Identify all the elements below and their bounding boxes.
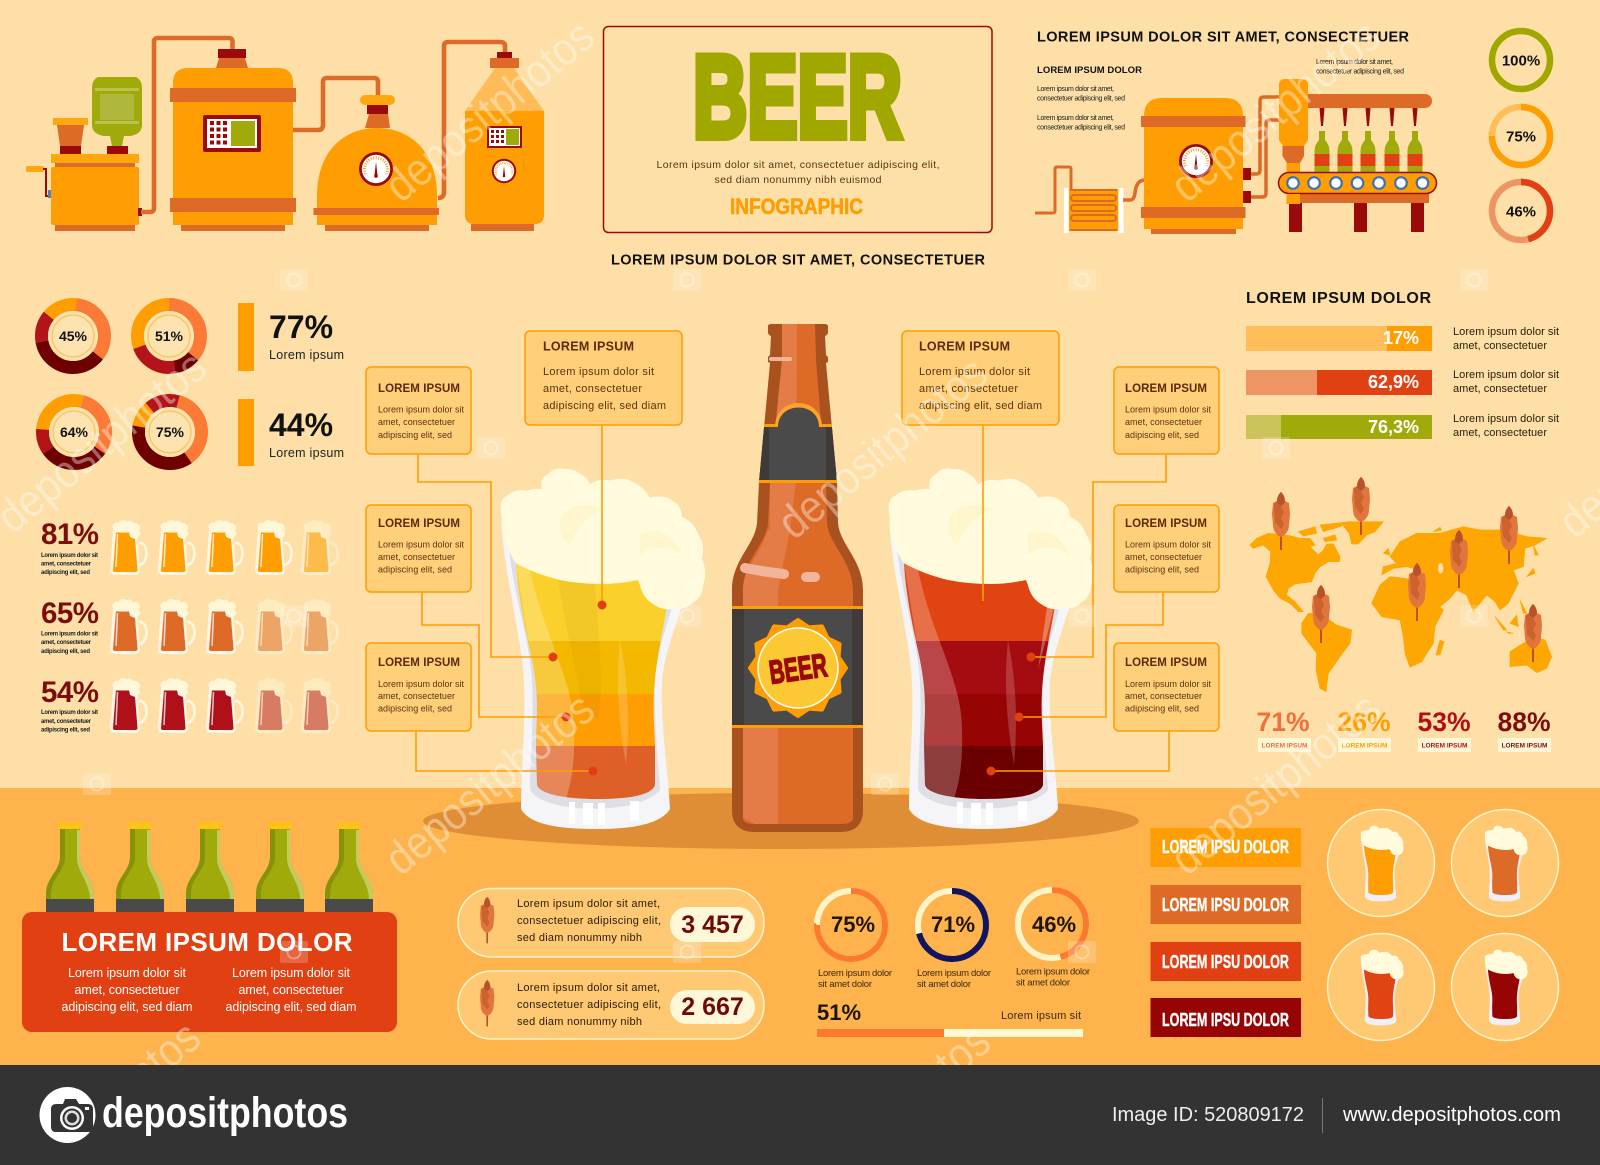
donut chart: 51%: 51% [155, 328, 184, 344]
text block: bottling notes [1037, 59, 1404, 132]
glass: light beer [501, 468, 705, 829]
bar: 62,9% [1246, 370, 1432, 395]
callout: right bottom: amet, consectetuer [1125, 691, 1202, 701]
callout: left top: Lorem ipsum dolor sit [378, 404, 464, 414]
legend label: dark red [1150, 998, 1301, 1037]
ring chart: bottom 75%: 75% [831, 912, 875, 937]
pill: 2 667: Lorem ipsum dolor sit amet, [517, 982, 660, 994]
bottle main label [728, 606, 868, 728]
callout: left top: LOREM IPSUM [378, 383, 460, 395]
mug row: 81%: Lorem ipsum dolor sit [41, 553, 98, 559]
watermarks: depositphotos [767, 346, 997, 549]
text block: bar notes: Lorem ipsum dolor sit [1453, 369, 1559, 381]
stat labels under map: LOREM IPSUM [1502, 742, 1547, 750]
pill: 3 457 [458, 888, 764, 957]
mug row: 65%: 65% [41, 597, 99, 630]
ring chart: 100% [1492, 31, 1550, 89]
callout: right bottom: LOREM IPSUM [1125, 657, 1207, 669]
callout: top right of bottle: Lorem ipsum dolor sit [919, 366, 1030, 378]
ring chart: bottom 46% [1016, 890, 1090, 988]
heading: bottling section: LOREM IPSUM DOLOR SIT AMET, CONSECTETUER [1037, 30, 1410, 46]
text block: bottling notes: Lorem ipsum dolor sit amet, [1037, 115, 1114, 122]
callout: left middle: Lorem ipsum dolor sit [378, 540, 464, 550]
callout: top right of bottle: amet, consectetuer [919, 383, 1018, 395]
callout: top right of bottle: LOREM IPSUM [919, 340, 1010, 354]
callout: right middle [1114, 505, 1219, 592]
callout: top left of bottle: Lorem ipsum dolor sit [543, 366, 654, 378]
callout: right middle: amet, consectetuer [1125, 552, 1202, 562]
text block: bottling notes: Lorem ipsum dolor sit amet, [1316, 59, 1393, 66]
donut chart: 45%: 45% [59, 328, 88, 344]
legend label: red [1150, 942, 1301, 981]
text block: bar notes: amet, consectetuer [1453, 383, 1547, 395]
callout: right top: Lorem ipsum dolor sit [1125, 404, 1211, 414]
table shadow [423, 793, 1139, 849]
icon: copper kettle [314, 95, 439, 231]
legend label: copper: LOREM IPSU DOLOR [1162, 895, 1289, 915]
stat: 77% [238, 303, 344, 371]
mug row: 54%: Lorem ipsum dolor sit [41, 710, 98, 716]
donut chart: 45% [42, 304, 104, 368]
subtitle text [656, 159, 940, 186]
icon: copper glass in circle [1452, 810, 1558, 916]
panel: title [604, 26, 992, 232]
callout: top left of bottle: LOREM IPSUM [543, 340, 634, 354]
ring chart: bottom 71%: 71% [931, 912, 975, 937]
connector dots [548, 600, 1036, 776]
callout: right bottom: adipiscing elit, sed [1125, 704, 1199, 714]
bar: 17% [1246, 326, 1432, 351]
ring chart: 75%: 75% [1506, 128, 1536, 146]
mug row: 81%: 81% [41, 518, 99, 551]
donut chart: 64%: 64% [60, 424, 89, 440]
stat labels under map: LOREM IPSUM [1262, 742, 1307, 750]
panel: red text block [22, 912, 397, 1032]
row of green bottles [46, 822, 373, 912]
mug row: 54% [41, 676, 338, 734]
progress bar: 51%: Lorem ipsum sit [1001, 1010, 1081, 1022]
stat: 77%: Lorem ipsum [269, 348, 344, 362]
icon: large mash tank [170, 49, 296, 231]
mug row: 54%: amet, consectetuer [41, 719, 92, 725]
donut chart: 75%: 75% [156, 424, 185, 440]
legend label: dark red: LOREM IPSU DOLOR [1162, 1010, 1289, 1030]
callout: right middle: Lorem ipsum dolor sit [1125, 540, 1211, 550]
pill: 2 667 [458, 971, 764, 1039]
pill: 3 457: sed diam nonummy nibh [517, 932, 642, 944]
icon: fermentation tank [465, 52, 544, 231]
callout: right top: adipiscing elit, sed [1125, 430, 1199, 440]
bottles on conveyor [1314, 108, 1422, 172]
stat: 44%: Lorem ipsum [269, 446, 344, 460]
text block: bar notes: Lorem ipsum dolor sit [1453, 326, 1559, 338]
callout: top right of bottle: adipiscing elit, sed diam [919, 400, 1042, 412]
bar: 76,3%: 76,3% [1368, 417, 1419, 437]
callout: left middle: amet, consectetuer [378, 552, 455, 562]
footer logo wordmark: depositphotos [102, 1089, 348, 1137]
ring chart: bottom 71% [917, 891, 991, 990]
callout: right middle: LOREM IPSUM [1125, 518, 1207, 530]
icon: amber glass in circle [1328, 810, 1434, 916]
pill: 3 457: Lorem ipsum dolor sit amet, [517, 898, 660, 910]
stat labels under map: LOREM IPSUM [1422, 742, 1467, 750]
progress bar: 51%: 51% [817, 1000, 861, 1025]
panel: red text block: Lorem ipsum dolor sit [68, 966, 187, 980]
bar: 76,3% [1246, 415, 1432, 439]
callout: left bottom: LOREM IPSUM [378, 657, 460, 669]
stat labels under map: 71% [1256, 707, 1310, 737]
connector lines [416, 425, 1169, 771]
icon: cooling coil [1035, 167, 1144, 233]
callout: left bottom: Lorem ipsum dolor sit [378, 679, 464, 689]
panel: red text block: amet, consectetuer [74, 983, 180, 997]
ring chart: 46% [1492, 182, 1550, 240]
mug row: 65%: amet, consectetuer [41, 640, 92, 646]
bottle badge: BEER [767, 646, 829, 691]
stat labels under map [1256, 707, 1551, 752]
stat labels under map: LOREM IPSUM [1342, 742, 1387, 750]
callout: top left of bottle [525, 331, 682, 425]
bottle neck label [758, 403, 837, 483]
pill: 3 457: consectetuer adipiscing elit, [517, 915, 661, 927]
callout: right bottom: Lorem ipsum dolor sit [1125, 679, 1211, 689]
ring chart: 100%: 100% [1502, 52, 1540, 70]
callout: left top [366, 367, 471, 454]
wheat markers on map [1272, 477, 1542, 662]
callout: left middle: LOREM IPSUM [378, 518, 460, 530]
panel: red text block: adipiscing elit, sed diam [226, 1000, 356, 1014]
pipes between tanks [141, 38, 505, 212]
icon: dark glass in circle [1452, 934, 1558, 1040]
ring chart: 46%: 46% [1506, 204, 1536, 220]
callout: top right of bottle [902, 331, 1059, 425]
watermarks: depositphotos [1160, 682, 1390, 885]
table floor [0, 788, 1600, 1065]
panel: red text block: adipiscing elit, sed diam [62, 1000, 192, 1014]
text block: bar notes: Lorem ipsum dolor sit [1453, 413, 1559, 425]
stat: 77%: 77% [269, 309, 333, 345]
ring chart: bottom 46%: 46% [1032, 912, 1076, 937]
stat: 44%: 44% [269, 407, 333, 443]
world map [1250, 522, 1552, 692]
callout: right top [1114, 367, 1219, 454]
callout: right top: amet, consectetuer [1125, 417, 1202, 427]
icon: bottling line [1278, 79, 1436, 232]
watermarks: depositphotos [374, 682, 604, 885]
pill: 2 667: sed diam nonummy nibh [517, 1016, 642, 1028]
ring chart: bottom 71%: Lorem ipsum dolor [917, 968, 991, 979]
icon: storage tank with gauge [1141, 97, 1280, 234]
ring chart: 75% [1492, 107, 1550, 165]
mug row: 65% [41, 597, 338, 655]
ring chart: bottom 75%: sit amet dolor [818, 979, 872, 990]
ring chart: bottom 75%: Lorem ipsum dolor [818, 968, 892, 979]
text block: bottling notes: consectetuer adipiscing elit, sed [1316, 68, 1404, 76]
legend label: copper [1150, 885, 1301, 924]
text block: bottling notes: LOREM IPSUM DOLOR [1037, 65, 1142, 76]
ring chart: bottom 46%: Lorem ipsum dolor [1016, 966, 1090, 978]
progress bar: 51% [817, 1000, 1083, 1037]
subtitle text: Lorem ipsum dolor sit amet, consectetuer adipiscing elit, [656, 159, 940, 171]
icon: mill and water machine [26, 77, 142, 231]
donut chart: 75% [138, 400, 202, 464]
callout: left middle: adipiscing elit, sed [378, 564, 452, 574]
pill: 2 667: consectetuer adipiscing elit, [517, 999, 661, 1011]
ring chart: bottom 71%: sit amet dolor [917, 979, 971, 990]
callout: left top: amet, consectetuer [378, 417, 455, 427]
mug row: 54%: adipiscing elit, sed [41, 728, 90, 734]
footer band [0, 1065, 1600, 1165]
footer website: www.depositphotos.com [1342, 1104, 1561, 1126]
callout: left bottom: amet, consectetuer [378, 691, 455, 701]
bar: 62,9%: 62,9% [1368, 372, 1419, 392]
central heading: LOREM IPSUM DOLOR SIT AMET, CONSECTETUER [611, 252, 986, 268]
pill: 3 457: 3 457 [681, 911, 744, 939]
text block: bottling notes: Lorem ipsum dolor sit amet, [1037, 86, 1114, 93]
glass: dark beer [889, 468, 1093, 829]
footer logo icon [40, 1087, 96, 1143]
mug row: 81% [41, 518, 338, 576]
callout: right top: LOREM IPSUM [1125, 383, 1207, 395]
panel: red text block: Lorem ipsum dolor sit [232, 966, 351, 980]
callout: top left of bottle: adipiscing elit, sed diam [543, 400, 666, 412]
legend label: red: LOREM IPSU DOLOR [1162, 952, 1289, 972]
footer image id: Image ID: 520809172 [1112, 1104, 1304, 1126]
callout: left bottom [366, 643, 471, 731]
text block: bar notes: amet, consectetuer [1453, 427, 1547, 439]
bottle badge [750, 620, 846, 716]
bar: 17%: 17% [1383, 328, 1419, 348]
callout: left top: adipiscing elit, sed [378, 430, 452, 440]
text block: bar notes [1453, 326, 1559, 439]
callout: top left of bottle: amet, consectetuer [543, 383, 642, 395]
mug row: 65%: Lorem ipsum dolor sit [41, 632, 98, 638]
mug row: 65%: adipiscing elit, sed [41, 649, 90, 655]
mug row: 81%: amet, consectetuer [41, 562, 92, 568]
icon: red glass in circle [1328, 934, 1434, 1040]
legend label: amber: LOREM IPSU DOLOR [1162, 837, 1289, 857]
subtitle text: sed diam nonummy nibh euismod [714, 174, 882, 186]
ring chart: bottom 75% [817, 891, 892, 990]
panel: red text block: LOREM IPSUM DOLOR [62, 927, 353, 957]
stat labels under map: 88% [1497, 707, 1551, 737]
mug row: 54%: 54% [41, 676, 99, 709]
stat labels under map: 26% [1337, 707, 1391, 737]
beer bottle [732, 324, 863, 832]
label: infographic: INFOGRAPHIC [730, 194, 863, 219]
mug row: 81%: adipiscing elit, sed [41, 570, 90, 576]
callout: left bottom: adipiscing elit, sed [378, 704, 452, 714]
heading: BEER: BEER [693, 31, 902, 162]
pill: 2 667: 2 667 [681, 993, 744, 1021]
legend label: amber [1150, 828, 1301, 867]
panel: red text block: amet, consectetuer [238, 983, 344, 997]
ring chart: bottom 46%: sit amet dolor [1016, 978, 1070, 988]
donut chart: 64% [42, 400, 106, 464]
text block: bottling notes: consectetuer adipiscing elit, sed [1037, 96, 1125, 102]
callout: right middle: adipiscing elit, sed [1125, 564, 1199, 574]
callout: right bottom [1114, 643, 1219, 731]
callout: left middle [366, 505, 471, 592]
stat: 44% [238, 399, 344, 466]
stat labels under map: 53% [1417, 707, 1471, 737]
watermark camera marks [83, 269, 1488, 963]
heading: bars: LOREM IPSUM DOLOR [1246, 290, 1431, 307]
text block: bottling notes: consectetuer adipiscing elit, sed [1037, 124, 1125, 132]
text block: bar notes: amet, consectetuer [1453, 340, 1547, 352]
donut chart: 51% [138, 304, 200, 368]
